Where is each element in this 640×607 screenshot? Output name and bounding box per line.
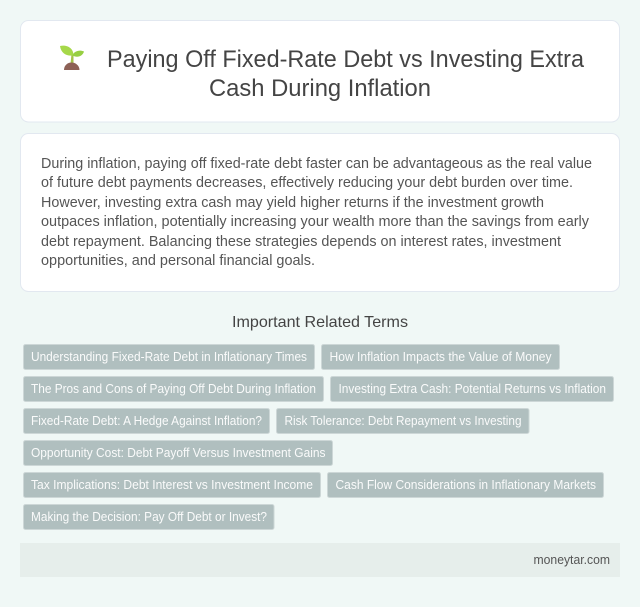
panel: summary text: However, investing extra cash may yield higher returns if the investment growth <box>41 195 544 211</box>
tag: risk tolerance: Risk Tolerance: Debt Repayment vs Investing <box>284 414 522 428</box>
title: Cash During Inflation <box>209 75 431 102</box>
tag: tax implications <box>24 472 320 498</box>
tag: risk tolerance <box>276 408 529 434</box>
panel: summary text: debt repayment. Balancing these strategies depends on interest rates, investment <box>41 234 561 250</box>
panel: summary text: During inflation, paying off fixed-rate debt faster can be advantageous as the real value <box>41 156 592 172</box>
tag: hedge against inflation <box>24 408 270 434</box>
tag: fixed-rate debt: Understanding Fixed-Rate Debt in Inflationary Times <box>31 350 307 364</box>
panel: summary text <box>20 134 620 292</box>
tag: cash flow: Cash Flow Considerations in Inflationary Markets <box>336 478 596 492</box>
tag list <box>24 344 614 530</box>
tag: value of money <box>322 344 560 370</box>
tag: hedge against inflation: Fixed-Rate Debt: A Hedge Against Inflation? <box>31 414 262 428</box>
tag: investing extra cash: Investing Extra Cash: Potential Returns vs Inflation <box>338 382 606 396</box>
panel: title card <box>20 20 620 122</box>
tag: investing extra cash <box>330 376 614 402</box>
tag: making the decision: Making the Decision: Pay Off Debt or Invest? <box>31 510 267 524</box>
tag: making the decision <box>24 504 274 530</box>
footer: moneytar.com <box>534 553 610 567</box>
panel: summary text: of future debt payments decreases, effectively reducing your debt burden over time. <box>41 175 573 191</box>
tag: opportunity cost <box>24 440 332 466</box>
icon: sprout <box>60 46 84 70</box>
tag: tax implications: Tax Implications: Debt Interest vs Investment Income <box>31 478 313 492</box>
tag: value of money: How Inflation Impacts the Value of Money <box>330 350 552 364</box>
tag: pros and cons <box>24 376 324 402</box>
panel: summary text: opportunities, and personal financial goals. <box>41 253 315 269</box>
panel: summary text: outpaces inflation, potentially increasing your wealth more than the savings from early <box>41 214 590 230</box>
heading: related terms: Important Related Terms <box>232 314 408 331</box>
tag: cash flow <box>328 472 604 498</box>
title: Paying Off Fixed-Rate Debt vs Investing Extra <box>107 46 585 73</box>
title <box>107 46 585 102</box>
tag: fixed-rate debt <box>24 344 314 370</box>
footer <box>20 543 620 577</box>
tag: pros and cons: The Pros and Cons of Paying Off Debt During Inflation <box>31 382 316 396</box>
tag: opportunity cost: Opportunity Cost: Debt Payoff Versus Investment Gains <box>31 446 326 460</box>
